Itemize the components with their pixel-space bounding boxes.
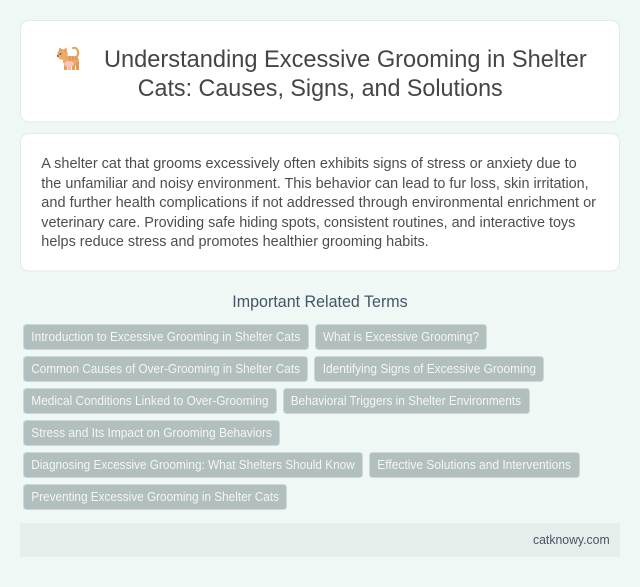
tag: diagnosing bbox=[24, 452, 362, 478]
tag: what is excessive grooming: What is Excessive Grooming? bbox=[323, 329, 479, 344]
footer source text: catknowy.com bbox=[533, 532, 610, 547]
text block: description paragraph: veterinary care. Providing safe hiding spots, consistent routines, and interactive toys bbox=[41, 214, 575, 231]
tag: behavioral triggers: Behavioral Triggers in Shelter Environments bbox=[291, 393, 521, 408]
tag: stress and impact bbox=[24, 420, 280, 446]
tag: medical conditions bbox=[24, 388, 276, 414]
panel: description bbox=[20, 134, 620, 271]
tag: introduction bbox=[24, 324, 308, 350]
tag: preventing: Preventing Excessive Grooming in Shelter Cats bbox=[31, 489, 279, 504]
panel: title card bbox=[20, 20, 620, 122]
tag: effective solutions: Effective Solutions and Interventions bbox=[377, 457, 571, 472]
text block: description paragraph: helps reduce stress and promotes healthier grooming habits. bbox=[41, 233, 429, 250]
tag: common causes: Common Causes of Over-Grooming in Shelter Cats bbox=[31, 361, 300, 376]
tag: identifying signs: Identifying Signs of Excessive Grooming bbox=[323, 361, 536, 376]
tag: introduction: Introduction to Excessive Grooming in Shelter Cats bbox=[31, 329, 301, 344]
tag: effective solutions bbox=[370, 452, 580, 478]
tag: stress and impact: Stress and Its Impact on Grooming Behaviors bbox=[31, 425, 272, 440]
icon: orange cat bbox=[57, 48, 79, 70]
tag: preventing bbox=[24, 484, 286, 510]
tag: medical conditions: Medical Conditions Linked to Over-Grooming bbox=[31, 393, 268, 408]
panel: related term tags bbox=[24, 324, 580, 510]
tag: diagnosing: Diagnosing Excessive Grooming: What Shelters Should Know bbox=[31, 457, 355, 472]
text block: description paragraph: A shelter cat that grooms excessively often exhibits signs of stress or anxiety due to bbox=[41, 155, 577, 172]
title: Understanding Excessive Grooming in Shelter bbox=[104, 46, 587, 73]
footer bar bbox=[20, 523, 620, 557]
tag: common causes bbox=[24, 356, 308, 382]
text block: description paragraph bbox=[41, 155, 596, 250]
heading: related terms: Important Related Terms bbox=[232, 293, 408, 311]
text block: description paragraph: and further health complications if not addressed through environmental enrichment or bbox=[41, 194, 596, 211]
tag: what is excessive grooming bbox=[316, 324, 486, 350]
title: Cats: Causes, Signs, and Solutions bbox=[138, 75, 503, 102]
tag: identifying signs bbox=[314, 356, 544, 382]
text block: description paragraph: the unfamiliar and noisy environment. This behavior can lead to fur loss, skin irritation, bbox=[41, 175, 589, 192]
title bbox=[104, 46, 587, 102]
tag: behavioral triggers bbox=[284, 388, 530, 414]
